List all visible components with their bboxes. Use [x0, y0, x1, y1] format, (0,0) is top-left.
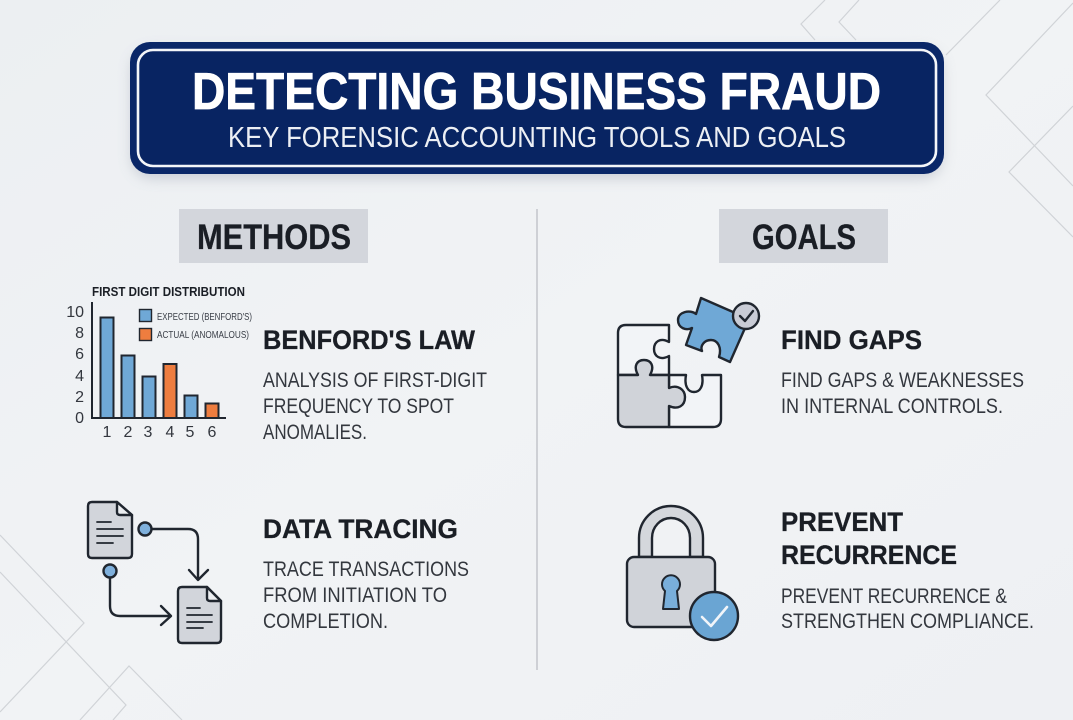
keyhole: [662, 575, 680, 609]
text block: prevent recurrence: STRENGTHEN COMPLIANCE.: [781, 610, 1034, 633]
y axis labels: 6: [75, 346, 84, 363]
text block: benford's law: ANOMALIES.: [263, 421, 367, 444]
text block: benford's law: BENFORD'S LAW: [263, 325, 475, 355]
text block: data tracing: TRACE TRANSACTIONS: [263, 558, 469, 581]
chart title: FIRST DIGIT DISTRIBUTION: [92, 284, 245, 299]
x axis labels: 2: [124, 424, 133, 441]
x axis labels: 1: [103, 424, 112, 441]
subtitle: KEY FORENSIC ACCOUNTING TOOLS AND GOALS: [228, 122, 846, 154]
text block: data tracing: FROM INITIATION TO: [263, 584, 447, 607]
x axis labels: [103, 424, 217, 441]
icon: puzzle: [618, 298, 759, 427]
heading: goals: [719, 209, 888, 263]
text block: find gaps: FIND GAPS: [781, 325, 922, 355]
text block: prevent recurrence: RECURRENCE: [781, 540, 957, 570]
text block: benford's law: ANALYSIS OF FIRST-DIGIT: [263, 369, 487, 392]
text block: prevent recurrence: [781, 507, 1034, 633]
x axis labels: 6: [208, 424, 217, 441]
text block: data tracing: [263, 514, 469, 633]
bars: [100, 318, 218, 418]
y axis labels: 2: [75, 389, 84, 406]
arrow from source document: [104, 564, 171, 625]
legend: EXPECTED (BENFORD'S): [157, 312, 252, 323]
check badge: [690, 592, 738, 640]
text block: prevent recurrence: PREVENT RECURRENCE &: [781, 585, 1007, 608]
text block: find gaps: [781, 325, 1024, 418]
icon: padlock: [627, 506, 738, 640]
text block: find gaps: IN INTERNAL CONTROLS.: [781, 395, 1003, 418]
bar chart: first digit distribution: [66, 284, 252, 441]
y axis labels: 8: [75, 325, 84, 342]
puzzle piece: blue: [678, 298, 749, 362]
text block: benford's law: FREQUENCY TO SPOT: [263, 395, 454, 418]
text block: benford's law: [263, 325, 487, 444]
legend: [140, 310, 252, 341]
icon: data tracing flow: [88, 502, 221, 643]
heading: goals: GOALS: [752, 218, 856, 257]
arrow to target document: [138, 522, 208, 580]
heading: methods: METHODS: [197, 218, 351, 257]
document target: [178, 587, 221, 643]
document source: [88, 502, 132, 558]
x axis labels: 4: [166, 424, 175, 441]
shackle: [639, 506, 703, 557]
check badge: [733, 303, 759, 329]
y axis labels: 10: [66, 304, 84, 321]
x axis labels: 3: [144, 424, 153, 441]
title banner: [130, 42, 944, 178]
x axis labels: 5: [186, 424, 195, 441]
y axis labels: 4: [75, 368, 84, 385]
text block: find gaps: FIND GAPS & WEAKNESSES: [781, 369, 1024, 392]
legend: ACTUAL (ANOMALOUS): [157, 330, 249, 341]
y axis labels: [66, 304, 84, 427]
text block: data tracing: COMPLETION.: [263, 610, 388, 633]
text block: prevent recurrence: PREVENT: [781, 507, 903, 537]
heading: methods: [179, 209, 368, 263]
y axis labels: 0: [75, 410, 84, 427]
text block: data tracing: DATA TRACING: [263, 514, 458, 544]
title: DETECTING BUSINESS FRAUD: [192, 63, 881, 121]
lock body: [627, 557, 715, 627]
